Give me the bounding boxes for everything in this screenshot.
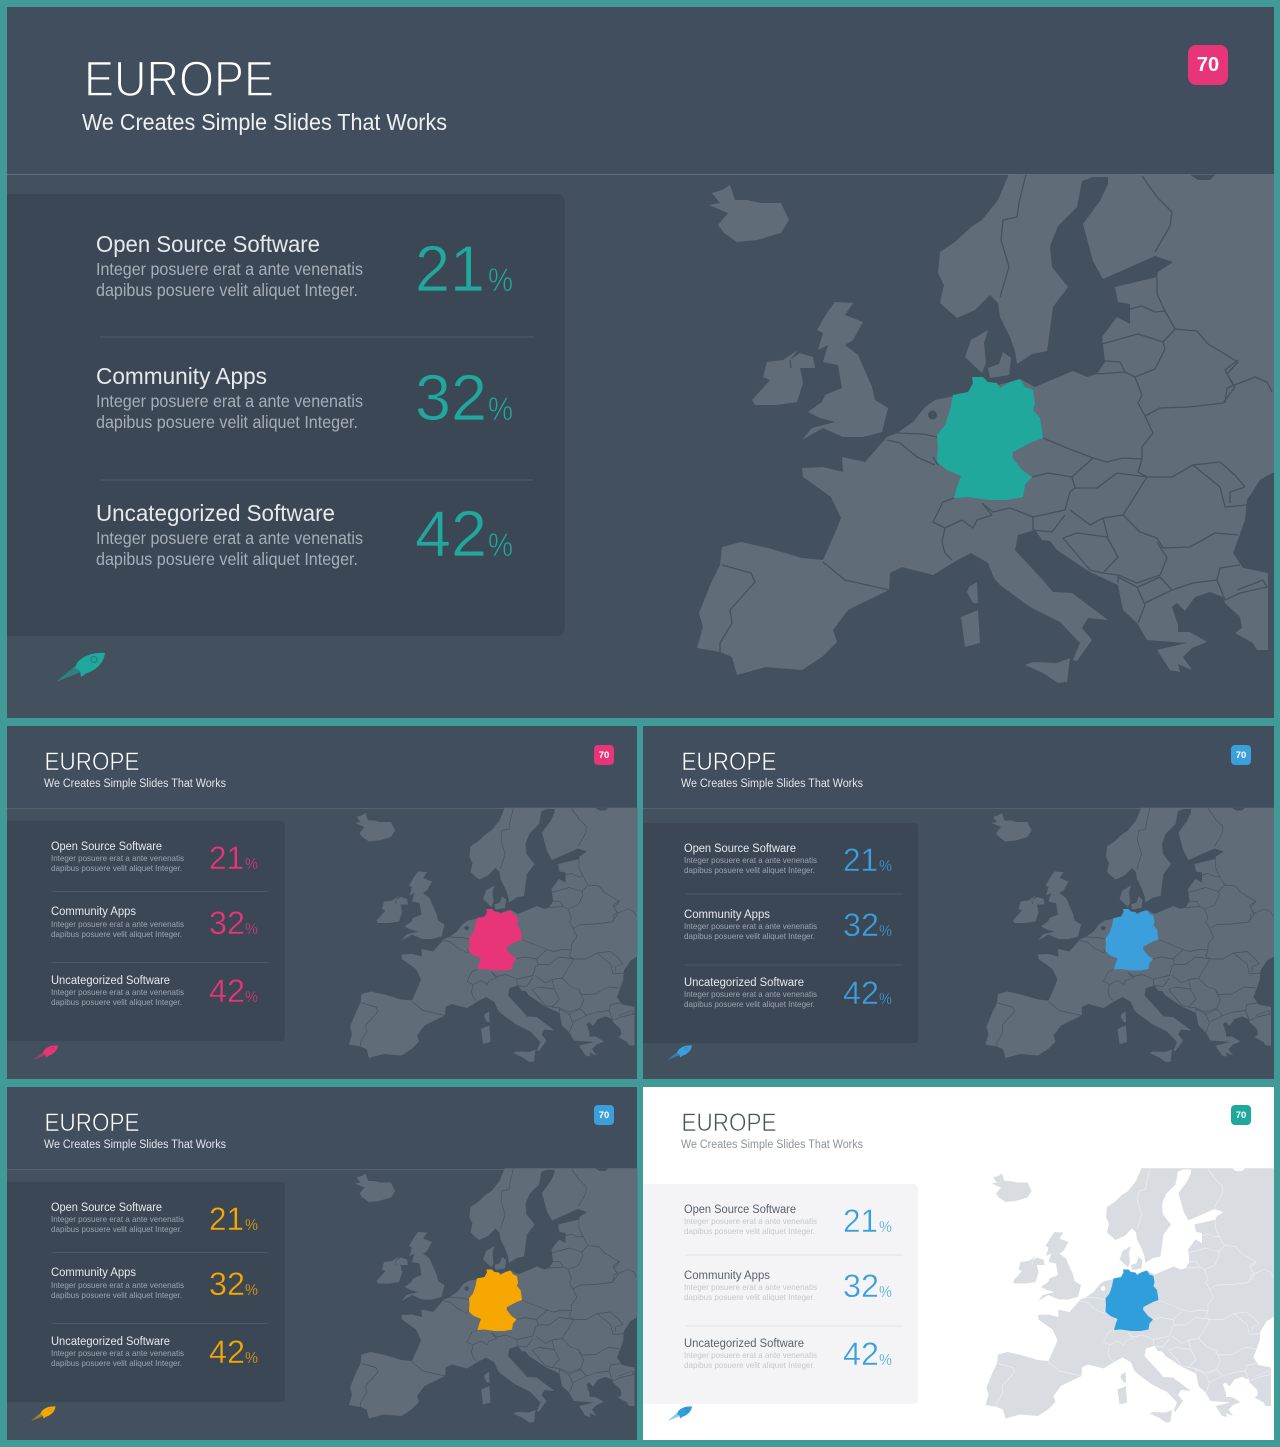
item: uncategorized software: %: [879, 991, 892, 1008]
item: uncategorized software: Integer posuere erat a ante venenatis: [96, 528, 363, 548]
item: uncategorized software: 42: [209, 1334, 245, 1370]
item: community apps: [51, 905, 258, 941]
item: uncategorized software: [684, 975, 892, 1011]
map of Europe with Germany highlighted: [349, 1168, 638, 1422]
badge: 70: [1236, 750, 1246, 761]
slide: light theme blue Germany: [643, 1087, 1274, 1440]
icon: rocket: [668, 1045, 692, 1060]
item: community apps: 32: [209, 1266, 245, 1302]
slide: blue Germany: [643, 726, 1274, 1079]
title: EUROPE: [44, 1109, 140, 1137]
item: uncategorized software: Integer posuere erat a ante venenatis: [684, 989, 817, 999]
item: community apps: dapibus posuere velit aliquet Integer.: [96, 412, 358, 432]
item: open source software: %: [245, 1217, 258, 1234]
item: uncategorized software: [96, 497, 513, 570]
item: community apps: Community Apps: [51, 1267, 136, 1279]
item: open source software: [51, 1201, 258, 1237]
item: open source software: Integer posuere erat a ante venenatis: [684, 855, 817, 865]
item: open source software: [96, 231, 513, 305]
item: uncategorized software: dapibus posuere velit aliquet Integer.: [51, 997, 182, 1007]
badge: [1231, 1105, 1251, 1125]
item: uncategorized software: %: [245, 1350, 258, 1367]
item: community apps: Community Apps: [96, 363, 267, 389]
item: open source software: 21: [843, 842, 878, 878]
icon: rocket: [31, 1406, 56, 1421]
item: community apps: [684, 907, 892, 943]
item: open source software: dapibus posuere velit aliquet Integer.: [51, 1224, 182, 1234]
item: uncategorized software: Uncategorized Software: [51, 975, 170, 987]
subtitle: We Creates Simple Slides That Works: [82, 109, 447, 135]
item: uncategorized software: %: [245, 989, 258, 1006]
item: uncategorized software: Integer posuere erat a ante venenatis: [51, 1348, 184, 1358]
item: uncategorized software: 42: [209, 973, 245, 1009]
item: uncategorized software: Integer posuere erat a ante venenatis: [684, 1350, 817, 1360]
item: community apps: 32: [415, 361, 487, 434]
item: open source software: Integer posuere erat a ante venenatis: [684, 1216, 817, 1226]
item: uncategorized software: %: [488, 527, 513, 563]
item: open source software: 21: [415, 232, 485, 305]
item: open source software: 21: [209, 1201, 244, 1237]
item: community apps: %: [879, 1284, 892, 1301]
title: EUROPE: [84, 51, 274, 107]
badge: [1231, 745, 1251, 765]
item: community apps: [51, 1266, 258, 1302]
item: community apps: %: [488, 391, 513, 427]
item: community apps: %: [245, 921, 258, 938]
item: open source software: 21: [209, 840, 244, 876]
badge: 70: [599, 1110, 609, 1121]
panel: statistics: [7, 821, 285, 1041]
item: community apps: [96, 361, 513, 434]
item: community apps: Integer posuere erat a ante venenatis: [684, 921, 817, 931]
item: open source software: Open Source Software: [51, 841, 162, 853]
item: open source software: [51, 840, 258, 876]
item: uncategorized software: [51, 1334, 258, 1370]
item: community apps: Integer posuere erat a ante venenatis: [51, 1280, 184, 1290]
panel: statistics: [643, 823, 918, 1043]
item: open source software: Open Source Software: [684, 1204, 796, 1216]
map of Europe with Germany highlighted: [986, 808, 1274, 1062]
badge: 70: [1197, 54, 1219, 76]
item: community apps: dapibus posuere velit aliquet Integer.: [51, 1290, 182, 1300]
slide: pink Germany: [7, 726, 638, 1079]
badge: [594, 1105, 614, 1125]
panel: statistics: [7, 1182, 285, 1402]
title: EUROPE: [682, 748, 776, 776]
badge: [1188, 45, 1228, 85]
item: uncategorized software: %: [879, 1352, 892, 1369]
badge: [594, 745, 614, 765]
item: uncategorized software: Uncategorized Software: [684, 977, 804, 989]
subtitle: We Creates Simple Slides That Works: [44, 778, 226, 790]
subtitle: We Creates Simple Slides That Works: [681, 778, 863, 790]
item: open source software: dapibus posuere velit aliquet Integer.: [96, 280, 358, 300]
subtitle: We Creates Simple Slides That Works: [44, 1139, 226, 1151]
item: community apps: 32: [843, 907, 879, 943]
item: uncategorized software: 42: [843, 1336, 879, 1372]
item: open source software: Open Source Software: [96, 231, 320, 257]
item: community apps: Integer posuere erat a ante venenatis: [96, 391, 363, 411]
panel: statistics: [643, 1184, 918, 1404]
title: EUROPE: [44, 748, 140, 776]
item: uncategorized software: [684, 1336, 892, 1372]
item: open source software: %: [488, 262, 513, 298]
item: open source software: 21: [843, 1203, 878, 1239]
item: open source software: %: [245, 856, 258, 873]
item: open source software: Integer posuere erat a ante venenatis: [96, 259, 363, 279]
item: open source software: %: [879, 858, 892, 875]
item: uncategorized software: 42: [415, 497, 487, 570]
item: uncategorized software: [51, 973, 258, 1009]
item: open source software: %: [879, 1219, 892, 1236]
map of Europe with Germany highlighted: [697, 174, 1274, 683]
item: open source software: [684, 842, 892, 878]
item: community apps: dapibus posuere velit aliquet Integer.: [684, 1292, 815, 1302]
item: community apps: Community Apps: [51, 906, 136, 918]
item: community apps: [684, 1268, 892, 1304]
icon: rocket: [668, 1406, 692, 1421]
item: uncategorized software: dapibus posuere velit aliquet Integer.: [96, 549, 358, 569]
subtitle: We Creates Simple Slides That Works: [681, 1139, 863, 1151]
item: uncategorized software: Integer posuere erat a ante venenatis: [51, 987, 184, 997]
item: uncategorized software: dapibus posuere velit aliquet Integer.: [684, 1360, 815, 1370]
item: community apps: %: [879, 923, 892, 940]
item: community apps: dapibus posuere velit aliquet Integer.: [684, 931, 815, 941]
map of Europe with Germany highlighted: [349, 808, 638, 1062]
item: uncategorized software: 42: [843, 975, 879, 1011]
item: open source software: [684, 1203, 892, 1239]
badge: 70: [1236, 1110, 1246, 1121]
panel: statistics: [7, 194, 565, 636]
item: community apps: Integer posuere erat a ante venenatis: [51, 919, 184, 929]
item: community apps: dapibus posuere velit aliquet Integer.: [51, 929, 182, 939]
item: uncategorized software: Uncategorized Software: [684, 1338, 804, 1350]
badge: 70: [599, 750, 609, 761]
item: open source software: dapibus posuere velit aliquet Integer.: [51, 863, 182, 873]
map of Europe with Germany highlighted: [986, 1168, 1274, 1422]
item: uncategorized software: dapibus posuere velit aliquet Integer.: [684, 999, 815, 1009]
item: community apps: 32: [209, 905, 245, 941]
slide: orange Germany: [7, 1087, 638, 1440]
item: community apps: %: [245, 1282, 258, 1299]
item: open source software: Open Source Software: [51, 1202, 162, 1214]
item: uncategorized software: Uncategorized Software: [51, 1336, 170, 1348]
item: open source software: dapibus posuere velit aliquet Integer.: [684, 865, 815, 875]
icon: rocket: [34, 1045, 58, 1060]
item: community apps: Community Apps: [684, 909, 770, 921]
item: open source software: Integer posuere erat a ante venenatis: [51, 1214, 184, 1224]
item: community apps: Community Apps: [684, 1270, 770, 1282]
item: community apps: Integer posuere erat a ante venenatis: [684, 1282, 817, 1292]
title: EUROPE: [682, 1109, 776, 1137]
slide: main teal Germany: [7, 7, 1274, 718]
item: open source software: dapibus posuere velit aliquet Integer.: [684, 1226, 815, 1236]
item: community apps: 32: [843, 1268, 879, 1304]
item: open source software: Open Source Software: [684, 843, 796, 855]
item: open source software: Integer posuere erat a ante venenatis: [51, 853, 184, 863]
item: uncategorized software: dapibus posuere velit aliquet Integer.: [51, 1358, 182, 1368]
icon: rocket: [56, 653, 105, 682]
item: uncategorized software: Uncategorized Software: [96, 500, 335, 526]
